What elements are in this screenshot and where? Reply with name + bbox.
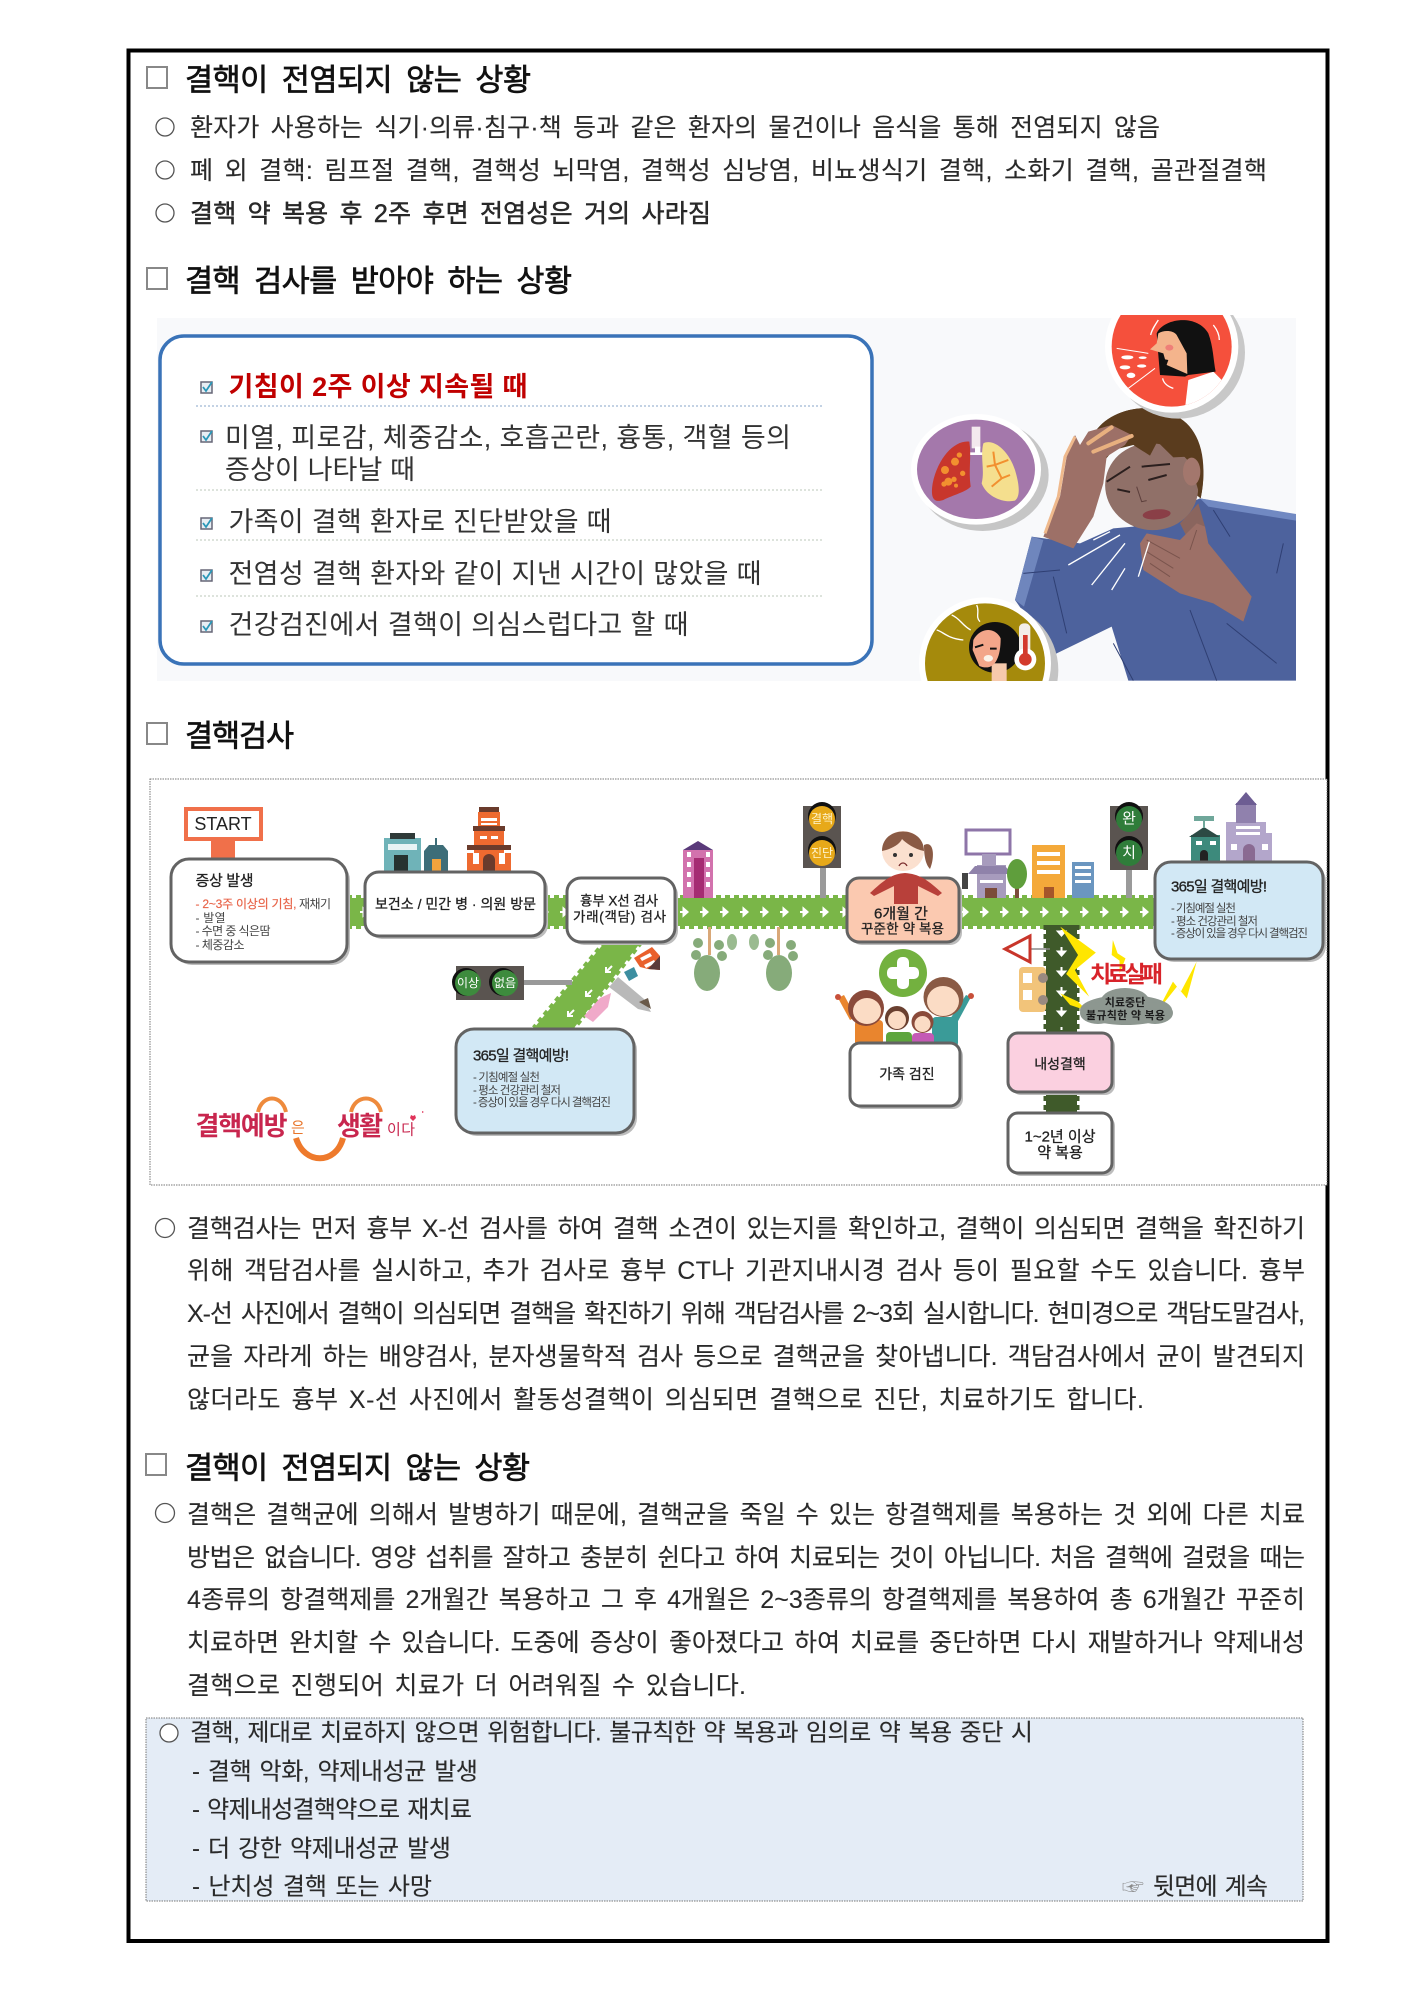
icon: traffic light 완치: 치 <box>1122 844 1136 862</box>
icon: traffic light 이상/없음 <box>452 966 572 1000</box>
box: symptoms: - 2~3주 이상의 기침, <box>196 897 296 911</box>
callout: risks of improper treatment <box>146 1718 1303 1901</box>
box: 365-day prevention lower: - 기침예절 실천 <box>473 1070 540 1084</box>
icon: START sign <box>186 809 261 860</box>
logo: 결핵예방은 생활이다: 결핵예방 <box>196 1111 288 1141</box>
icon: lungs bubble <box>911 414 1049 531</box>
box: x-ray and sputum test <box>567 878 678 945</box>
box: 365-day prevention lower <box>456 1029 637 1136</box>
text block: non-contagious situations: 폐 외 결핵: 림프절 결핵, 결핵성 뇌막염, 결핵성 심낭염, 비뇨생식기 결핵, 소화기 결핵, 골관절결핵 <box>190 157 1267 185</box>
box: 6 months of medication <box>847 878 962 945</box>
text block: test explanation: 않더라도 흉부 X-선 사진에서 활동성결핵이 의심되면 결핵으로 진단, 치료하기도 합니다. <box>187 1386 1144 1414</box>
heading: 결핵이 전염되지 않는 상황: 결핵이 전염되지 않는 상황 <box>185 64 531 98</box>
callout: risks of improper treatment: ☞ <box>1122 1874 1144 1900</box>
heading: 결핵이 전염되지 않는 상황 (second): 결핵이 전염되지 않는 상황 <box>185 1452 530 1486</box>
box: 365-day prevention lower: - 평소 건강관리 철저 <box>473 1084 561 1097</box>
icon: traffic light 완치 <box>1110 802 1148 898</box>
box: symptoms <box>171 859 350 965</box>
panel: TB test flowchart <box>150 779 1327 1185</box>
icon: sneezing woman bubble <box>1112 315 1245 419</box>
box: 6 months of medication: 꾸준한 약 복용 <box>861 922 944 936</box>
icon: traffic light 이상/없음: 없음 <box>494 976 516 990</box>
icon: warning triangle and bus <box>1005 936 1050 1012</box>
icon: hilltop buildings <box>1189 792 1272 862</box>
callout: risks of improper treatment: - 결핵 악화, 약제내성균 발생 <box>192 1758 478 1786</box>
checklist card: 미열, 피로감, 체중감소, 호흡곤란, 흉통, 객혈 등의 <box>225 423 791 453</box>
icon: lightning bolts <box>1060 927 1197 1012</box>
checklist card: 건강검진에서 결핵이 의심스럽다고 할 때 <box>228 610 688 640</box>
callout: risks of improper treatment: - 더 강한 약제내성균 발생 <box>192 1836 451 1862</box>
box: symptoms: - 체중감소 <box>196 938 244 952</box>
icon: family <box>835 977 974 1047</box>
text block: test explanation: 위해 객담검사를 실시하고, 추가 검사로 흉부 CT나 기관지내시경 검사 등이 필요할 수도 있습니다. 흉부 <box>187 1257 1305 1285</box>
box: drug-resistant TB: 내성결핵 <box>1034 1056 1086 1072</box>
logo: 결핵예방은 생활이다: 이다 <box>387 1122 415 1138</box>
callout: risks of improper treatment: - 난치성 결핵 또는 사망 <box>192 1874 432 1900</box>
text block: test explanation: X-선 사진에서 결핵이 의심되면 결핵을 확진하기 위해 객담검사를 2~3회 실시합니다. 현미경으로 객담도말검사, <box>187 1300 1305 1328</box>
box: 365-day prevention lower: - 증상이 있을 경우 다시 결핵검진 <box>473 1095 611 1109</box>
icon: green plus <box>879 949 927 997</box>
text block: treatment explanation: 치료하면 완치할 수 있습니다. 도중에 증상이 좋아졌다고 하여 치료를 중단하면 다시 재발하거나 약제내성 <box>187 1629 1305 1657</box>
label: treatment failure: 치료실패 <box>1090 961 1163 987</box>
box: 1-2 years of medication: 1~2년 이상 <box>1024 1128 1096 1146</box>
callout: risks of improper treatment: - 약제내성결핵약으로 재치료 <box>192 1796 472 1824</box>
box: clinic visit: 보건소 / 민간 병 · 의원 방문 <box>375 896 536 912</box>
panel: when to get tested <box>158 315 1296 681</box>
icon: town buildings <box>962 830 1094 898</box>
cloud: treatment interruption: 치료중단 <box>1105 996 1145 1009</box>
box: x-ray and sputum test: 가래(객담) 검사 <box>573 910 667 924</box>
road: main route <box>347 897 1172 927</box>
box: symptoms: 재채기 <box>299 897 331 911</box>
icon: traffic light 이상/없음: 이상 <box>457 976 479 990</box>
box: 365-day prevention lower: 365일 결핵예방! <box>473 1048 569 1064</box>
logo: 결핵예방은 생활이다: 생활 <box>337 1111 383 1141</box>
box: symptoms: 증상 발생 <box>196 872 254 890</box>
checklist card: 기침이 2주 이상 지속될 때 <box>228 372 528 402</box>
text block: test explanation: 균을 자라게 하는 배양검사, 분자생물학적 검사 등으로 결핵균을 찾아냅니다. 객담검사에서 균이 발견되지 <box>187 1343 1305 1371</box>
text block: test explanation: 결핵검사는 먼저 흉부 X-선 검사를 하여 결핵 소견이 있는지를 확인하고, 결핵이 의심되면 결핵을 확진하기 <box>187 1215 1305 1243</box>
icon: small vehicles and houses <box>584 947 660 1022</box>
text block: non-contagious situations: 환자가 사용하는 식기·의류·침구·책 등과 같은 환자의 물건이나 음식을 통해 전염되지 않음 <box>190 114 1160 142</box>
icon: pink building <box>683 841 713 898</box>
box: 365-day prevention right: - 평소 건강관리 철저 <box>1171 915 1258 928</box>
text block: treatment explanation: 4종류의 항결핵제를 2개월간 복용하고 그 후 4개월은 2~3종류의 항결핵제를 복용하여 총 6개월간 꾸준히 <box>187 1586 1305 1614</box>
box: 365-day prevention right: 365일 결핵예방! <box>1171 878 1267 896</box>
icon: traffic light 결핵/진단: 결핵 <box>811 812 833 826</box>
box: 6 months of medication: 6개월 간 <box>874 906 928 922</box>
heading: 결핵 검사를 받아야 하는 상황: 결핵 검사를 받아야 하는 상황 <box>185 264 572 298</box>
box: drug-resistant TB <box>1008 1033 1115 1095</box>
cloud: treatment interruption <box>1080 988 1173 1025</box>
checklist card <box>160 336 872 664</box>
road: dark failure route <box>1044 925 1079 1113</box>
text block: treatment explanation <box>156 1501 1305 1700</box>
icon: traffic light 결핵/진단 <box>803 802 841 898</box>
icon: traffic light 결핵/진단: 진단 <box>811 846 833 860</box>
icon: trees under road <box>691 927 798 991</box>
logo: 결핵예방은 생활이다 <box>196 1098 424 1158</box>
box: 365-day prevention right: - 기침예절 실천 <box>1171 901 1236 915</box>
road: diagonal branch <box>534 942 641 1028</box>
box: symptoms: - 발열 <box>196 911 226 925</box>
box: family screening: 가족 검진 <box>879 1066 935 1082</box>
text block: non-contagious situations: 결핵 약 복용 후 2주 후면 전염성은 거의 사라짐 <box>190 200 711 228</box>
callout: risks of improper treatment: 뒷면에 계속 <box>1153 1874 1268 1900</box>
box: symptoms: - 수면 중 식은땀 <box>196 924 270 938</box>
icon: fever woman bubble <box>925 603 1058 681</box>
icon: START sign: START <box>194 814 252 834</box>
checklist card: 가족이 결핵 환자로 진단받았을 때 <box>228 507 612 537</box>
icon: traffic light 완치: 완 <box>1122 810 1136 828</box>
box: family screening <box>835 977 974 1109</box>
box: 365-day prevention right: - 증상이 있을 경우 다시 결핵검진 <box>1171 926 1308 940</box>
icon: clinic buildings <box>384 807 511 872</box>
box: x-ray and sputum test: 흉부 X선 검사 <box>580 894 659 908</box>
illustration: coughing man with symptom bubbles <box>917 315 1296 681</box>
checklist card: 전염성 결핵 환자와 같이 지낸 시간이 많았을 때 <box>228 559 762 589</box>
callout: risks of improper treatment: 결핵, 제대로 치료하지 않으면 위험합니다. 불규칙한 약 복용과 임의로 약 복용 중단 시 <box>190 1720 1033 1746</box>
heading: 결핵검사: 결핵검사 <box>185 720 294 754</box>
text block: treatment explanation: 결핵은 결핵균에 의해서 발병하기 때문에, 결핵균을 죽일 수 있는 항결핵제를 복용하는 것 외에 다른 치료 <box>187 1501 1305 1529</box>
text block: treatment explanation: 방법은 없습니다. 영양 섭취를 잘하고 충분히 쉰다고 하여 치료되는 것이 아닙니다. 처음 결핵에 걸렸을 때는 <box>187 1544 1305 1572</box>
text block: non-contagious situations <box>156 114 1267 228</box>
icon: girl <box>870 831 942 904</box>
box: 1-2 years of medication <box>1008 1113 1115 1176</box>
icon: man coughing <box>1015 408 1296 681</box>
box: 1-2 years of medication: 약 복용 <box>1037 1144 1083 1162</box>
text block: treatment explanation: 결핵으로 진행되어 치료가 더 어려워질 수 있습니다. <box>187 1672 746 1700</box>
box: 365-day prevention right <box>1155 862 1326 962</box>
text block: test explanation <box>156 1215 1305 1414</box>
checklist card: 증상이 나타날 때 <box>225 455 415 485</box>
logo: 결핵예방은 생활이다: 은 <box>291 1120 305 1136</box>
cloud: treatment interruption: 불규칙한 약 복용 <box>1086 1008 1165 1022</box>
box: clinic visit <box>365 872 548 939</box>
